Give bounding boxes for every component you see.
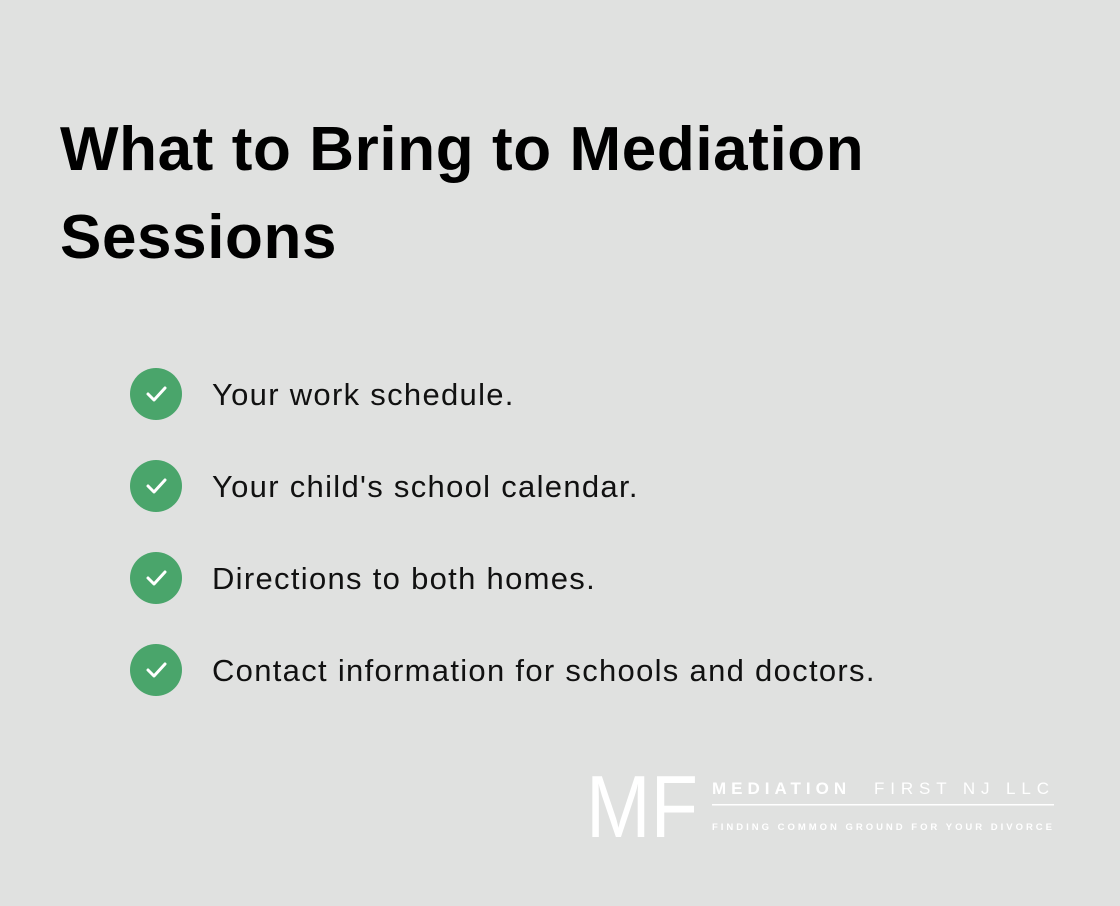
text: Your work schedule.: [212, 377, 515, 412]
title: What to Bring to Mediation: [60, 115, 864, 184]
item 3: [130, 552, 596, 604]
icon: check: [130, 644, 182, 696]
text: Your child's school calendar.: [212, 469, 639, 504]
title: Sessions: [60, 203, 337, 272]
item 4: [130, 644, 876, 696]
icon: check: [130, 552, 182, 604]
logo: [586, 770, 1054, 842]
logo: FIRST NJ LLC: [874, 779, 1054, 798]
title: [60, 115, 864, 272]
item 1: [130, 368, 515, 420]
icon: check: [130, 460, 182, 512]
logo: FINDING COMMON GROUND FOR YOUR DIVORCE: [712, 822, 1052, 833]
text: Directions to both homes.: [212, 561, 596, 596]
icon: check: [130, 368, 182, 420]
item 2: [130, 460, 639, 512]
logo: MEDIATION: [712, 779, 851, 798]
text: Contact information for schools and doctors.: [212, 653, 876, 688]
